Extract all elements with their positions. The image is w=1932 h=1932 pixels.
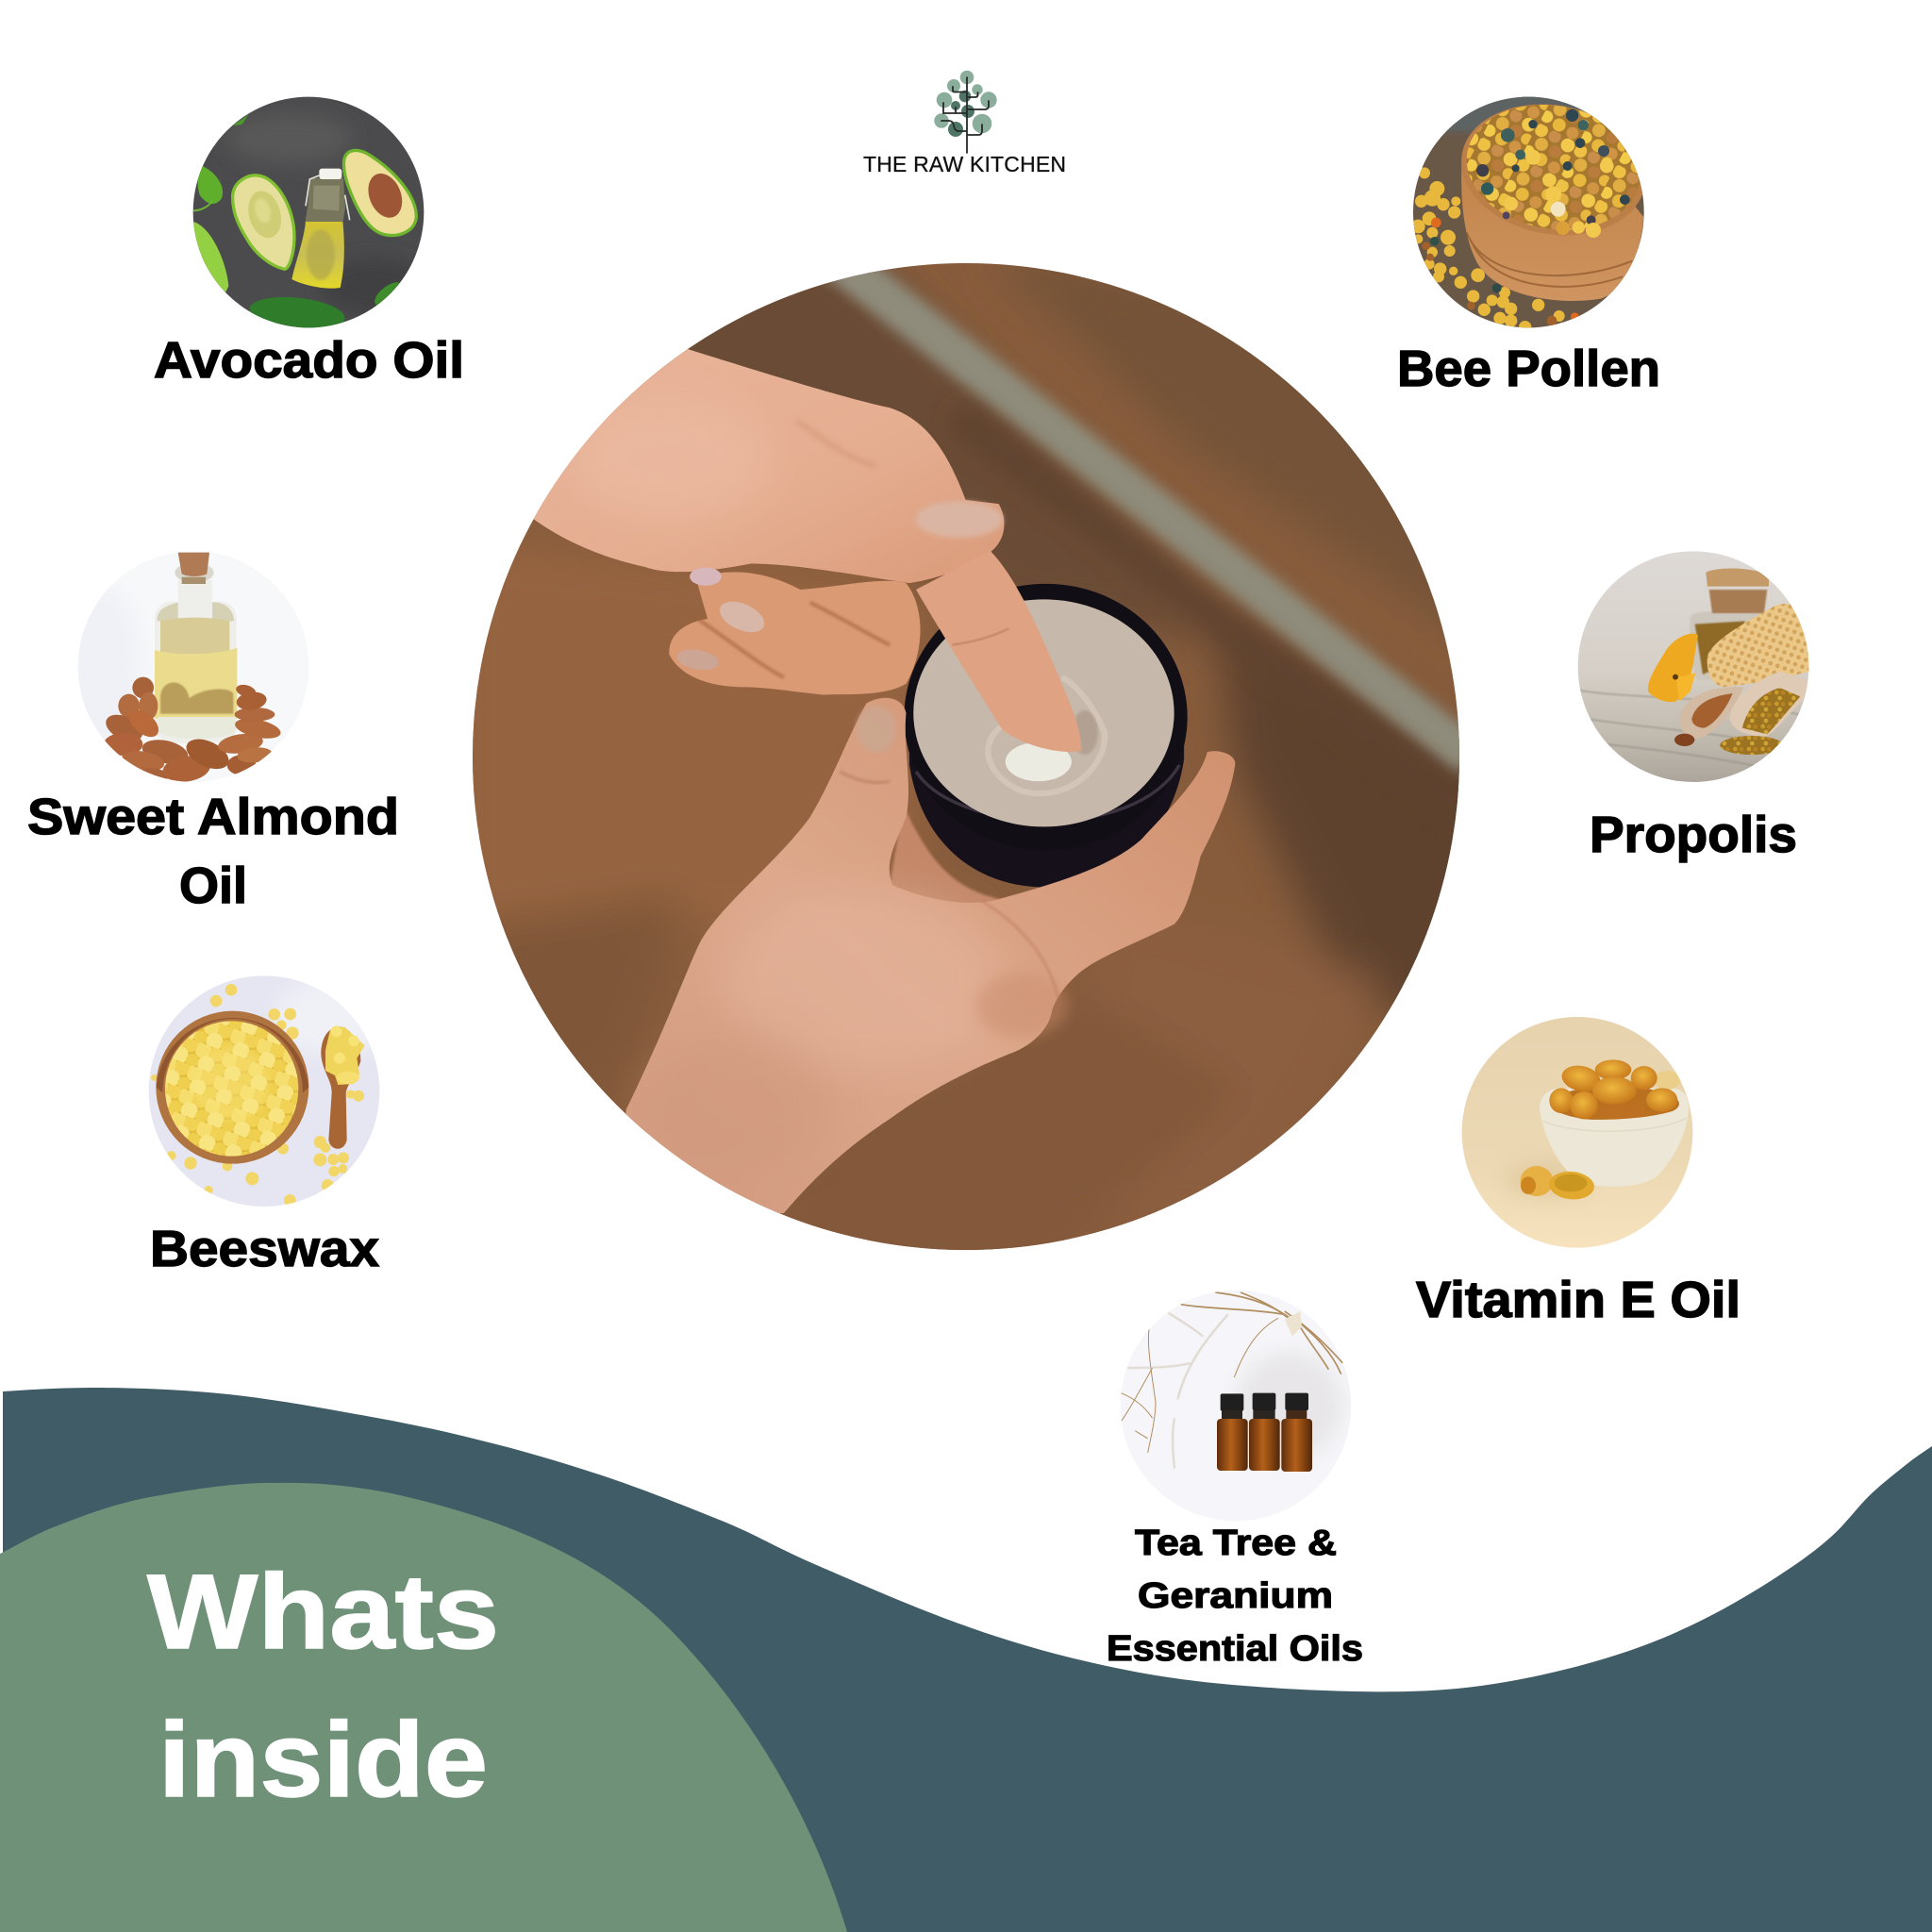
ingredient: propolis xyxy=(1577,551,1809,863)
label: Beeswax: Beeswax xyxy=(150,1221,379,1277)
top hand xyxy=(519,346,1004,583)
label: Tea Tree and Geranium Essential Oils: Essential Oils xyxy=(1107,1629,1363,1669)
photo: vitamin E capsules xyxy=(1462,1017,1692,1248)
bottle xyxy=(305,178,345,224)
label: Sweet Almond Oil: Sweet Almond xyxy=(27,789,399,845)
title: Whats inside xyxy=(147,1553,499,1819)
capsules xyxy=(1549,1059,1680,1120)
left half avocado xyxy=(233,175,294,269)
photo: propolis xyxy=(1577,551,1809,782)
label: Tea Tree and Geranium Essential Oils: Tea Tree & xyxy=(1135,1524,1337,1563)
label: Vitamin E Oil: Vitamin E Oil xyxy=(1416,1272,1740,1328)
main photo: fingertip dipping into cream jar xyxy=(473,263,1459,1250)
lower hand finger behind jar xyxy=(891,811,1002,903)
jar xyxy=(904,584,1188,887)
logo wordmark: THE RAW KITCHEN xyxy=(863,152,1066,176)
green wave panel xyxy=(0,1483,847,1932)
label: Avocado Oil: Avocado Oil xyxy=(154,332,464,389)
right half avocado xyxy=(343,150,416,235)
flower xyxy=(1648,634,1698,702)
ingredient: avocado oil xyxy=(154,85,464,389)
label: Tea Tree and Geranium Essential Oils xyxy=(1107,1524,1363,1669)
ingredient: beeswax xyxy=(149,975,380,1268)
label: Sweet Almond Oil xyxy=(27,789,399,914)
ingredient: tea tree and geranium essential oils xyxy=(1107,1283,1363,1669)
curled fingers xyxy=(669,572,921,695)
bowl front xyxy=(1540,1104,1689,1187)
ingredient: bee pollen xyxy=(1397,85,1660,397)
photo: bee pollen xyxy=(1413,96,1644,328)
title: Whats inside: inside xyxy=(158,1701,488,1819)
photo: essential oil bottles xyxy=(1108,1283,1363,1538)
title: Whats inside: Whats xyxy=(147,1553,499,1671)
label: Propolis: Propolis xyxy=(1590,807,1797,863)
icon: tree xyxy=(934,71,997,153)
label: Tea Tree and Geranium Essential Oils: Geranium xyxy=(1138,1576,1333,1616)
photo: sweet almond oil xyxy=(77,553,281,782)
label: Sweet Almond Oil: Oil xyxy=(179,858,247,914)
dark teal wave background xyxy=(3,1388,1932,1932)
logo: The Raw Kitchen xyxy=(863,71,1066,176)
bowl back xyxy=(1540,1088,1689,1187)
pointing finger xyxy=(916,551,1081,752)
ingredient: vitamin E oil xyxy=(1416,1009,1740,1328)
photo: beeswax xyxy=(149,975,379,1207)
photo: avocado oil xyxy=(192,96,425,328)
label: Bee Pollen: Bee Pollen xyxy=(1397,341,1660,397)
lower hand xyxy=(618,698,1235,1213)
ingredient: sweet almond oil xyxy=(27,542,399,914)
